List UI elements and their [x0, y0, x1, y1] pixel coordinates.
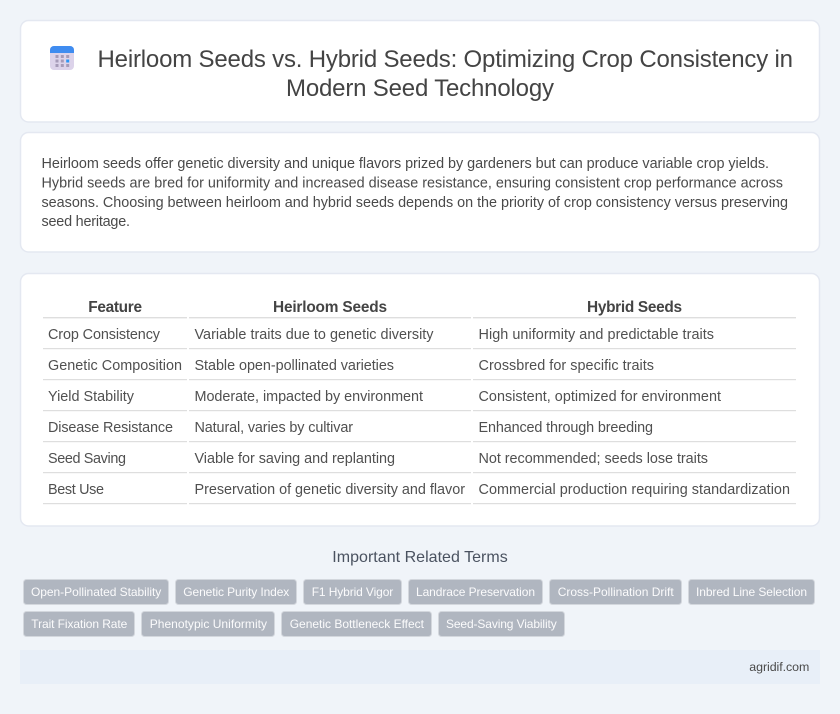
row: seed saving: Seed Saving — [48, 451, 126, 467]
tag: Genetic Bottleneck Effect — [290, 617, 425, 631]
row: disease resistance: Natural, varies by cultivar — [194, 420, 353, 436]
tag: Landrace Preservation — [416, 585, 535, 599]
row: yield stability: Moderate, impacted by environment — [194, 389, 423, 405]
text block: intro paragraph: seasons. Choosing between heirloom and hybrid seeds depends on the priority of crop consistency versus preserving — [42, 195, 788, 211]
table header row: Feature — [88, 299, 142, 316]
tag: Genetic Purity Index — [183, 585, 289, 599]
footer source text: agridif.com — [749, 660, 809, 674]
title: Modern Seed Technology — [286, 75, 554, 102]
row: crop consistency: Variable traits due to genetic diversity — [194, 327, 434, 343]
tag: Seed-Saving Viability — [446, 617, 557, 631]
table header row — [88, 299, 682, 316]
footer bar — [20, 650, 820, 684]
title: Heirloom Seeds vs. Hybrid Seeds: Optimizing Crop Consistency in — [98, 46, 793, 73]
tag — [142, 612, 274, 636]
row: genetic composition: Crossbred for specific traits — [478, 358, 654, 374]
tag: Inbred Line Selection — [696, 585, 807, 599]
row: crop consistency — [48, 327, 714, 343]
tag — [438, 612, 564, 636]
tag — [304, 580, 402, 604]
row: genetic composition: Genetic Composition — [48, 358, 182, 374]
text block: intro paragraph: seed heritage. — [42, 214, 130, 230]
row: disease resistance — [48, 420, 653, 436]
row: best use: Best Use — [48, 482, 104, 498]
table header row: Heirloom Seeds — [273, 299, 387, 316]
tag — [282, 612, 432, 636]
panel: description — [20, 132, 820, 252]
row: seed saving: Not recommended; seeds lose traits — [478, 451, 708, 467]
heading: related terms: Important Related Terms — [332, 549, 508, 566]
panel: comparison table — [20, 274, 820, 526]
tag — [688, 580, 814, 604]
text block: intro paragraph — [42, 156, 788, 230]
row: best use: Preservation of genetic diversity and flavor — [194, 482, 465, 498]
row: best use: Commercial production requiring standardization — [478, 482, 790, 498]
title — [98, 46, 793, 102]
text block: intro paragraph: Heirloom seeds offer genetic diversity and unique flavors prized by gardeners but can produce variable crop yields. — [42, 156, 769, 172]
row: yield stability — [48, 389, 721, 405]
icon: calendar — [50, 46, 74, 70]
tag — [176, 580, 296, 604]
tag — [408, 580, 542, 604]
tag: Open-Pollinated Stability — [31, 585, 161, 599]
row: yield stability: Consistent, optimized for environment — [478, 389, 721, 405]
row: yield stability: Yield Stability — [48, 389, 135, 405]
tag: Phenotypic Uniformity — [150, 617, 267, 631]
row: best use — [48, 482, 790, 498]
tag: Trait Fixation Rate — [31, 617, 128, 631]
tag — [24, 580, 168, 604]
tag — [550, 580, 682, 604]
tag — [24, 612, 134, 636]
tag: Cross-Pollination Drift — [558, 585, 674, 599]
text block: intro paragraph: Hybrid seeds are bred for uniformity and increased disease resistance, ensuring consistent crop performance across — [42, 176, 783, 192]
tag list: related terms — [24, 580, 814, 636]
row: genetic composition: Stable open-pollinated varieties — [194, 358, 394, 374]
row: disease resistance: Enhanced through breeding — [478, 420, 653, 436]
row: crop consistency: High uniformity and predictable traits — [478, 327, 714, 343]
table header row: Hybrid Seeds — [587, 299, 682, 316]
panel: title header — [20, 20, 820, 122]
row: disease resistance: Disease Resistance — [48, 420, 173, 436]
row: genetic composition — [48, 358, 654, 374]
row: crop consistency: Crop Consistency — [48, 327, 161, 343]
row: seed saving: Viable for saving and replanting — [194, 451, 395, 467]
row: seed saving — [48, 451, 708, 467]
tag: F1 Hybrid Vigor — [312, 585, 393, 599]
